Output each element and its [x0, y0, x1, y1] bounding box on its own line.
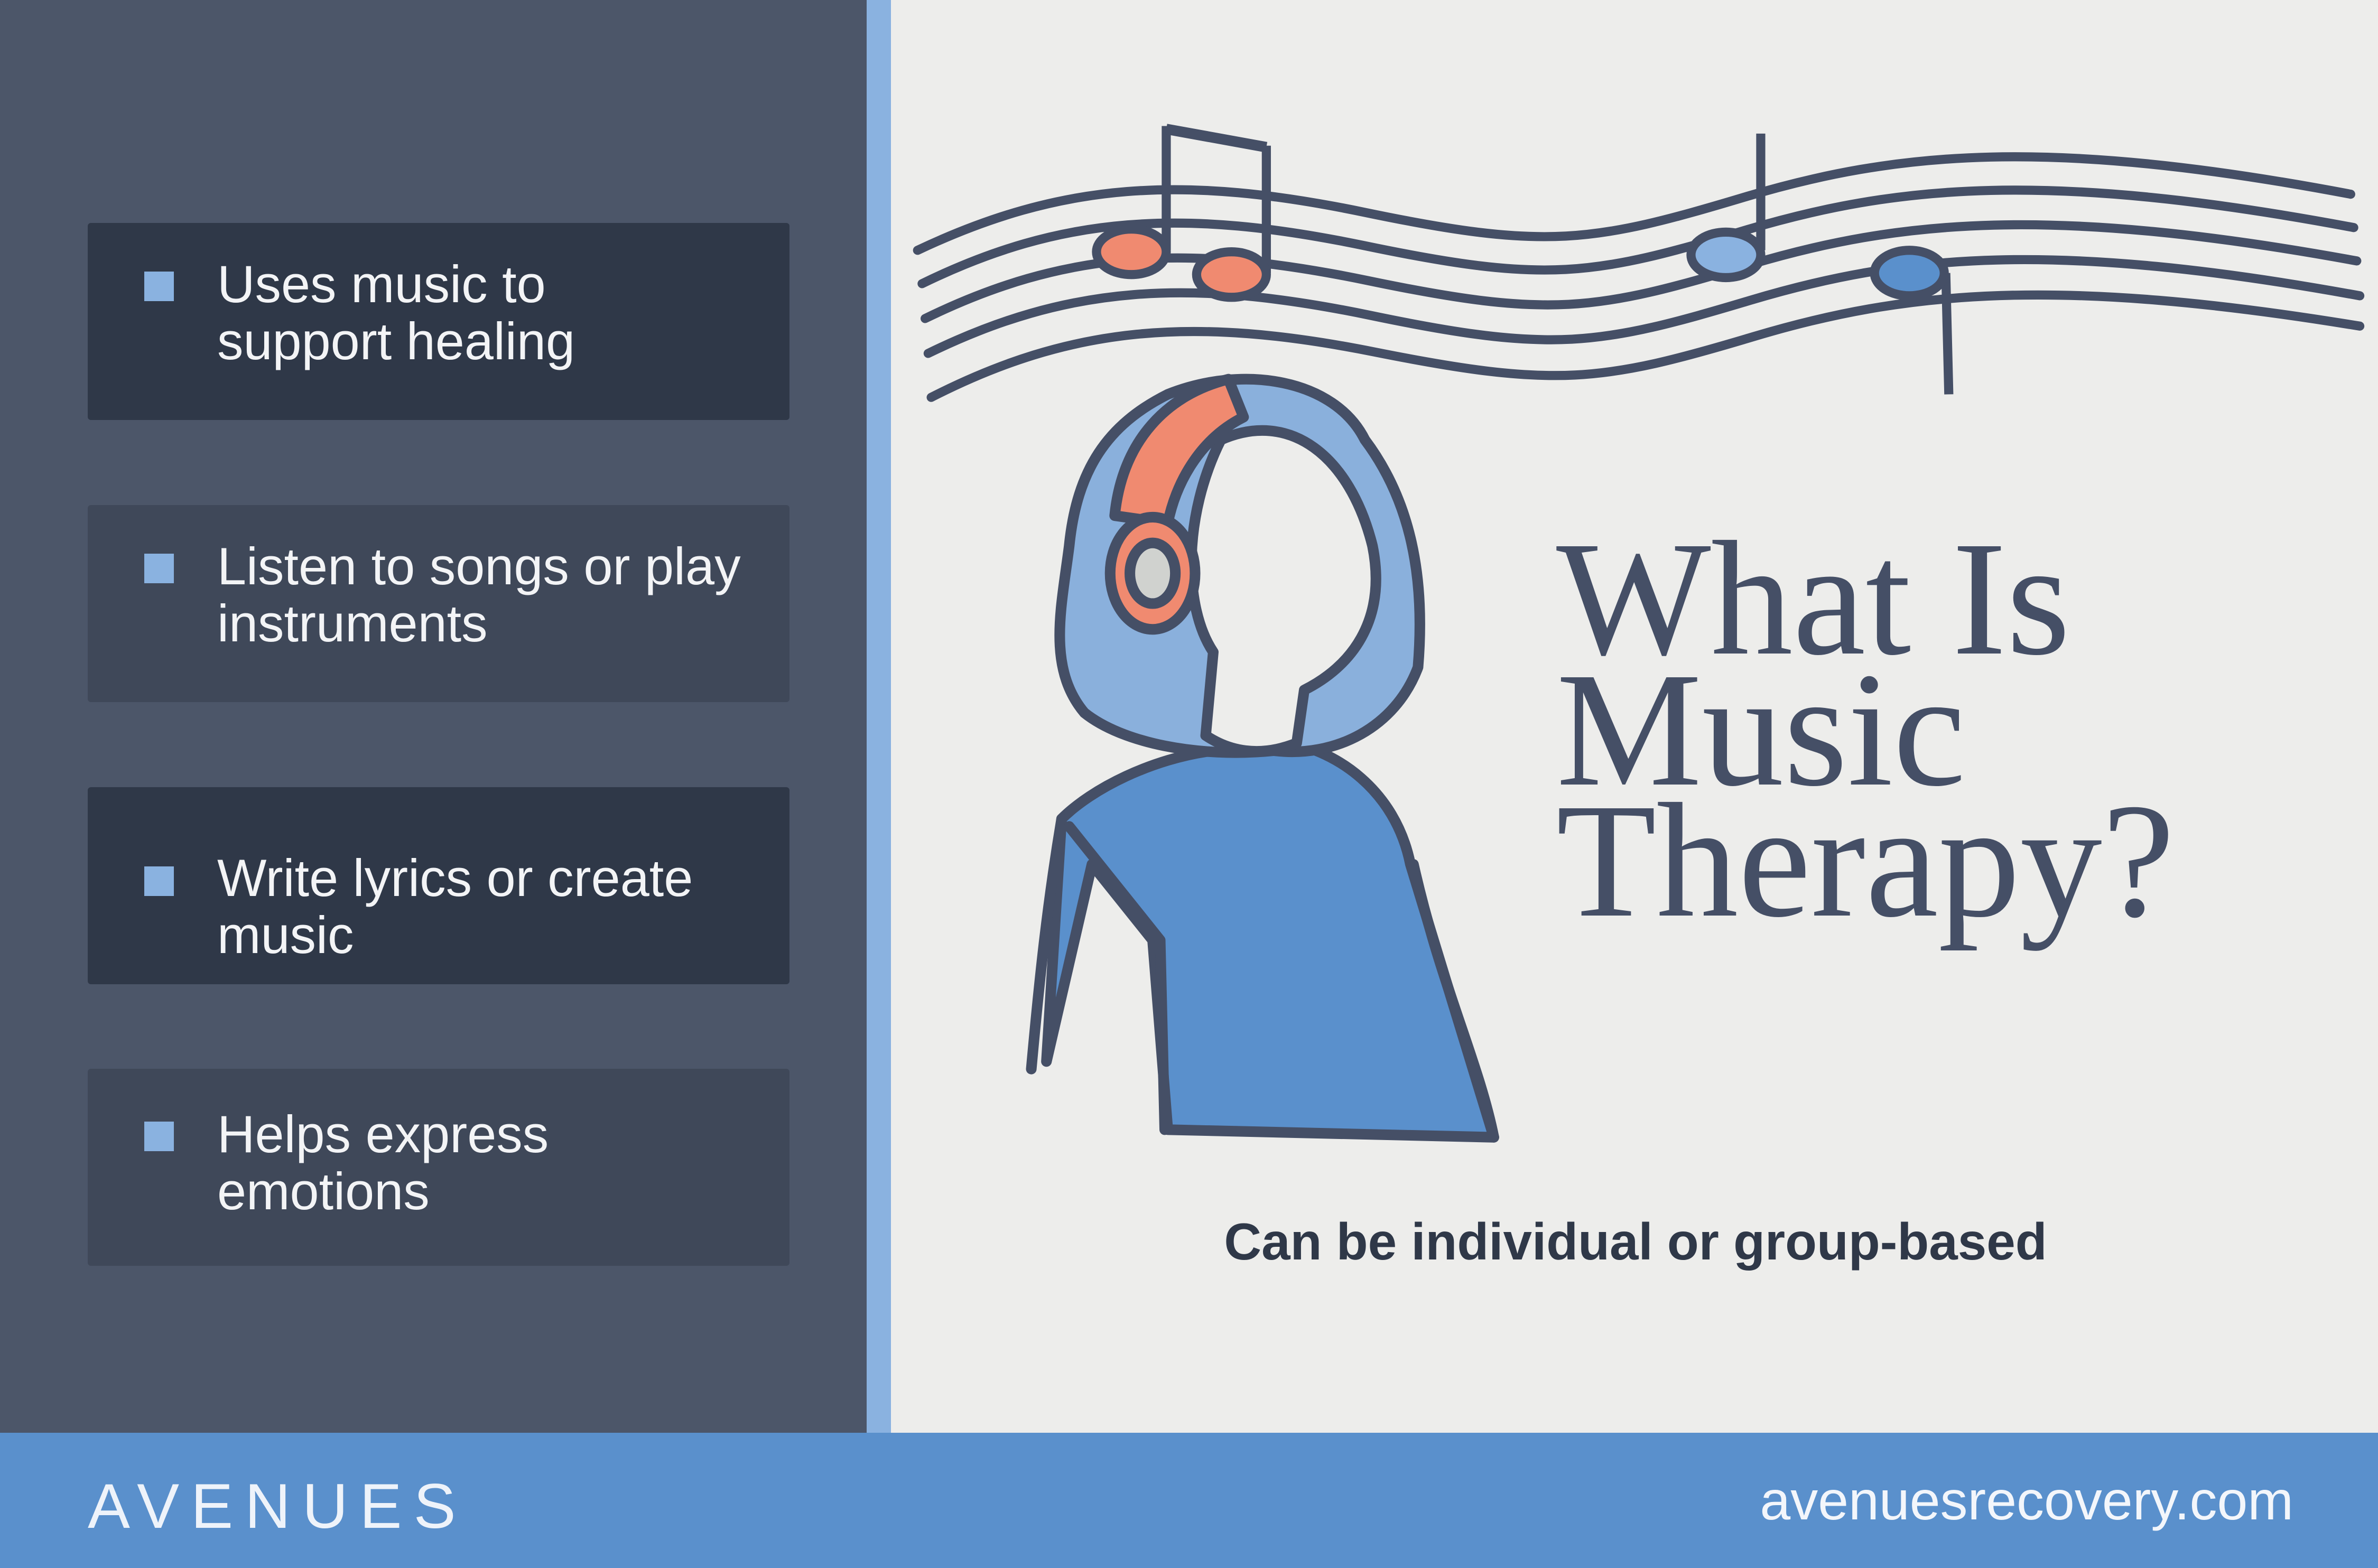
item 4: Helps express: [217, 1105, 549, 1163]
website: avenuesrecovery.com: [1760, 1470, 2293, 1532]
subtitle: Can be individual or group-based: [1224, 1212, 2047, 1271]
title: Music: [1556, 639, 1966, 820]
item 4: emotions: [217, 1162, 430, 1220]
item 2: [88, 505, 789, 702]
person: [1032, 379, 1494, 1137]
item 3: music: [217, 906, 354, 964]
item 2: Listen to songs or play: [217, 537, 741, 595]
footer: [0, 1433, 2378, 1568]
staff lines: [917, 157, 2360, 397]
title: [1556, 508, 2175, 951]
item 1: Uses music to: [217, 255, 546, 313]
item 2: instruments: [217, 594, 488, 652]
item 1: support healing: [217, 312, 575, 370]
item 4: [88, 1069, 789, 1266]
music notes: [1097, 126, 1949, 394]
logo: AVENUES: [88, 1471, 468, 1542]
panel: left list: [0, 0, 872, 1433]
item 3: [88, 787, 789, 984]
item 1: [88, 223, 789, 420]
title: What Is: [1556, 508, 2070, 689]
title: Therapy?: [1556, 770, 2175, 951]
item 3: Write lyrics or create: [217, 848, 693, 907]
